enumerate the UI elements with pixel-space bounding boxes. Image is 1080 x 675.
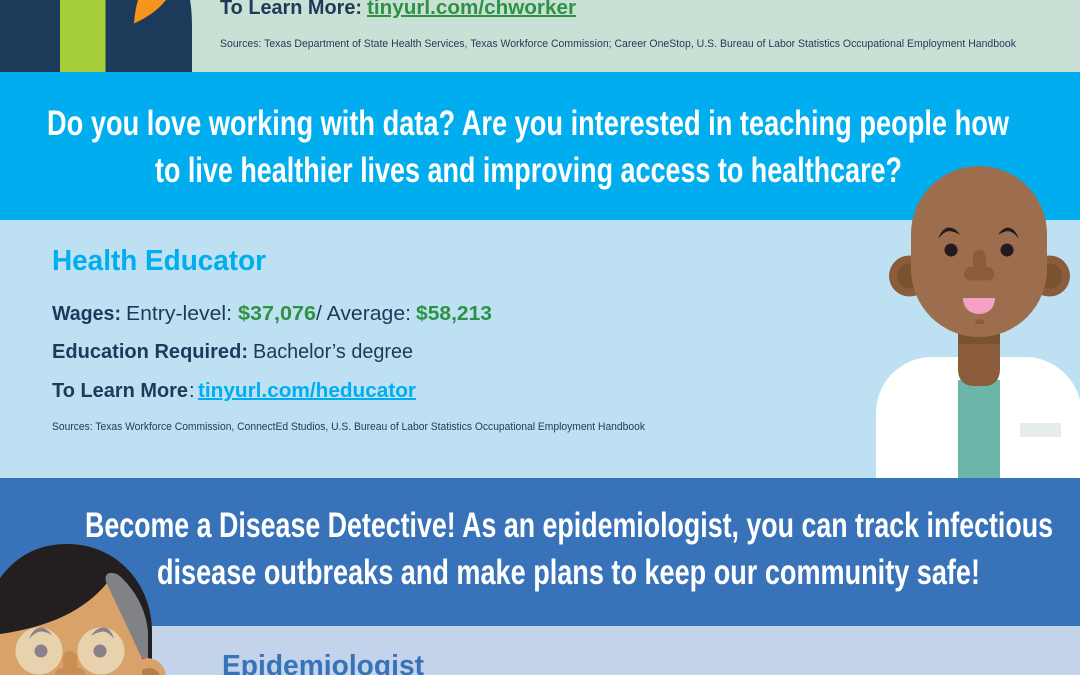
text: wages: Wages: <box>52 303 121 325</box>
icon: epidemiologist woman with glasses <box>0 544 166 675</box>
panel: epidemiologist question banner <box>0 478 1080 626</box>
text: wages: $37,076 <box>238 303 316 325</box>
text: to learn more community health worker <box>220 0 576 19</box>
heading: health educator: Health Educator <box>52 245 266 277</box>
icon: health educator man in white coat <box>876 166 1080 478</box>
text: to learn more health educator: : <box>189 380 195 402</box>
text: to learn more health educator <box>52 380 416 402</box>
panel: health educator question banner <box>0 72 1080 220</box>
text: education required: Bachelor’s degree <box>253 341 413 363</box>
text: wages: $58,213 <box>416 303 492 325</box>
text: to learn more health educator: To Learn More <box>52 380 188 402</box>
panel: community health worker details (cropped) <box>0 0 1080 72</box>
icon: community health worker torso <box>0 0 192 72</box>
text: education required <box>52 341 413 363</box>
panel: epidemiologist details (cropped) <box>0 626 1080 675</box>
text: wages: / Average: <box>316 303 411 325</box>
text: wages: Entry-level: <box>126 303 232 325</box>
text: sources health educator: Sources: Texas Workforce Commission, ConnectEd Studios, U.S. Bureau of Labor Statistics Occupational Employment Handbook <box>52 421 645 433</box>
text: to learn more health educator: tinyurl.com/heducator <box>198 380 416 402</box>
panel: health educator details <box>0 220 1080 478</box>
text: sources community health worker: Sources: Texas Department of State Health Services, Texas Workforce Commission; Career OneStop, U.S. Bureau of Labor Statistics Occupational Employment Handbook <box>220 38 1016 50</box>
text: education required: Education Required: <box>52 341 248 363</box>
text: wages <box>52 303 492 325</box>
